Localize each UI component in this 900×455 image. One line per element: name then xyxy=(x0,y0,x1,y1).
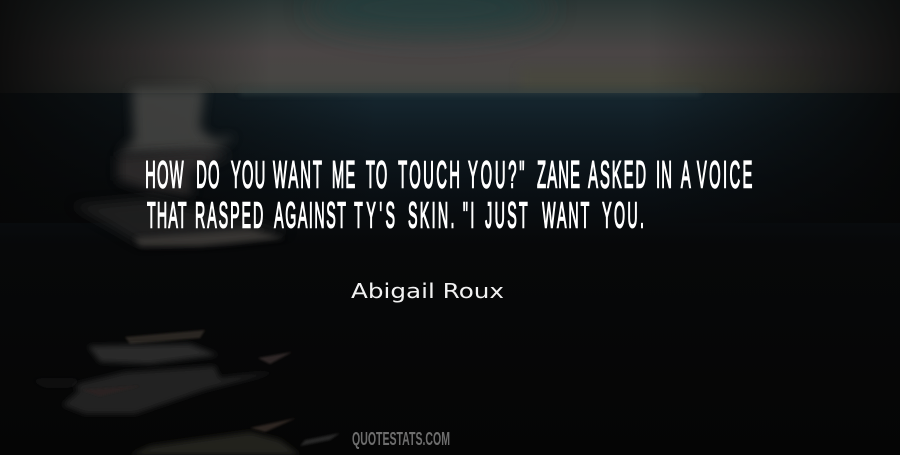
quote line 1: IN xyxy=(656,155,673,197)
quote line 2: THAT xyxy=(147,195,188,235)
light reflection on water, lower xyxy=(32,330,340,455)
author name: Abigail Roux xyxy=(351,279,504,303)
quote line 1: A xyxy=(681,155,692,197)
quote line 2: TY'S xyxy=(354,195,399,235)
quote line 2: JUST xyxy=(485,195,530,235)
quote line 1: VOICE xyxy=(697,155,755,197)
quote line 2: YOU. xyxy=(602,195,646,235)
quote line 2: RASPED xyxy=(195,195,265,235)
quote line 1: WANT xyxy=(273,155,324,197)
light reflection on water, upper xyxy=(72,88,290,246)
quote line 1: HOW xyxy=(145,155,185,197)
quote text xyxy=(145,155,755,235)
quote line 1: ASKED xyxy=(588,155,648,197)
quote line 2: WANT xyxy=(542,195,591,235)
quote line 1: YOU?" xyxy=(468,155,527,197)
quote line 1: TO xyxy=(366,155,388,197)
quote line 1: ME xyxy=(332,155,356,197)
watermark: QUOTESTATS.COM xyxy=(352,429,450,449)
quote line 1: DO xyxy=(196,155,221,197)
quote line 2: AGAINST xyxy=(274,195,348,235)
quote line 2: SKIN. xyxy=(408,195,457,235)
quote line 1: YOU xyxy=(231,155,266,197)
quote line 1: TOUCH xyxy=(398,155,462,197)
quote line 1: ZANE xyxy=(537,155,581,197)
quote line 2: "I xyxy=(463,195,477,235)
